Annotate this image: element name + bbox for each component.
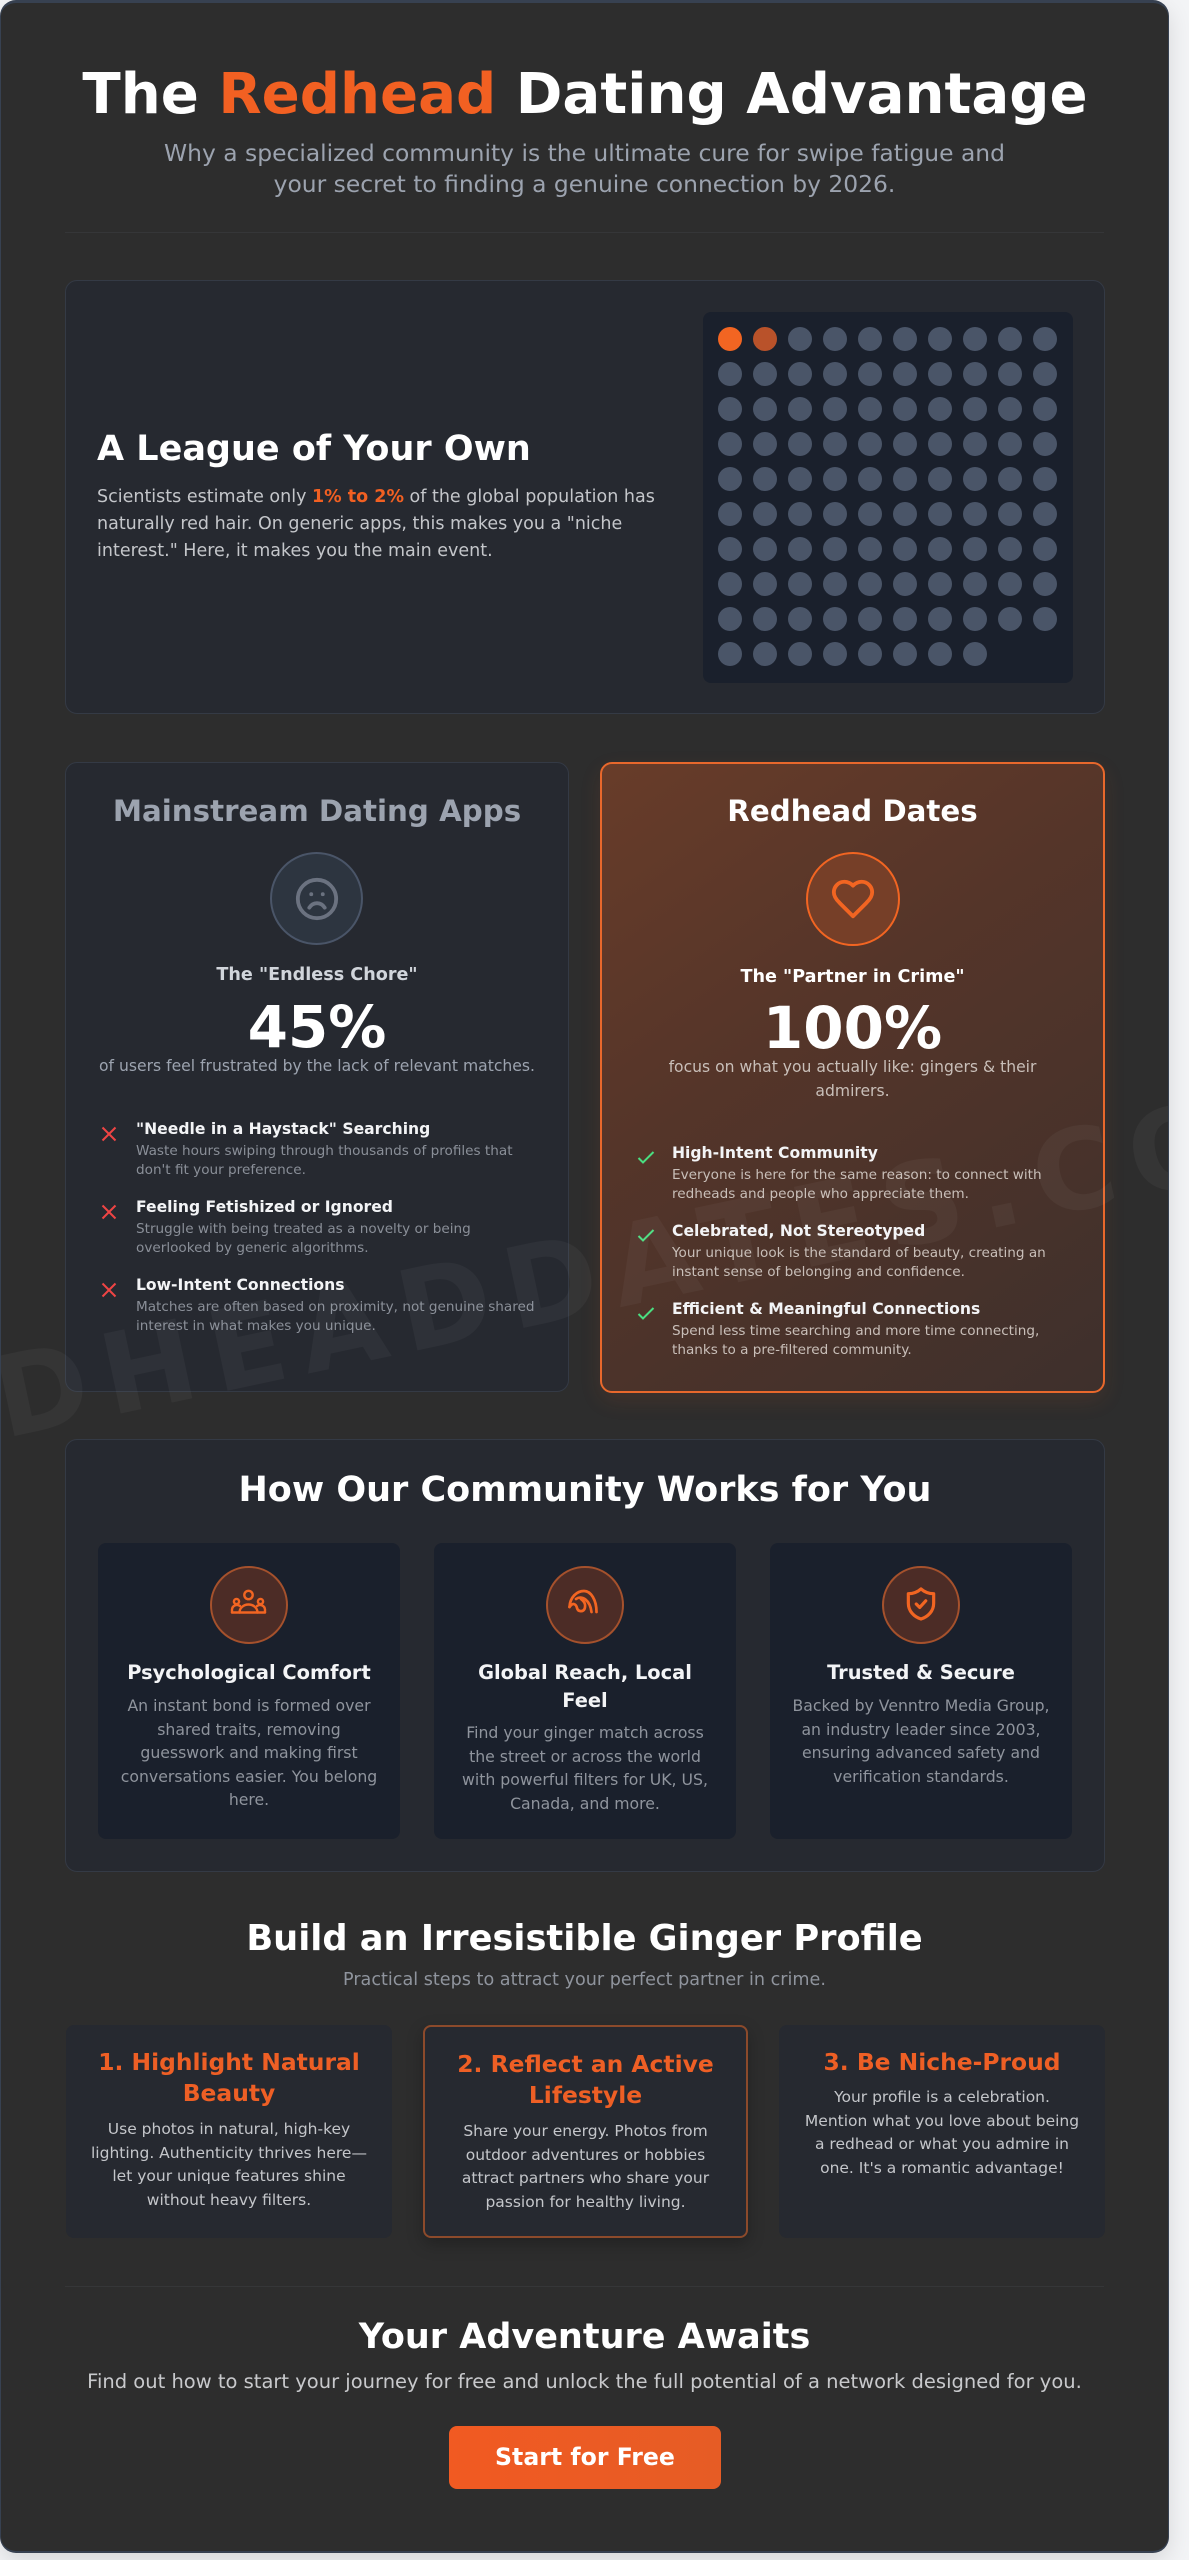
card: tip 1: let your unique features shine (112, 2167, 346, 2185)
tip 2 title: 2. Reflect an Active (457, 2050, 714, 2078)
item: celebrated (638, 1222, 1046, 1280)
stat: 45%: 45% (248, 993, 386, 1061)
tip 2 text: Share your energy. Photos from (463, 2122, 708, 2140)
heading: redhead dates: Redhead Dates (727, 794, 978, 828)
stat caption (669, 1058, 1036, 1100)
item: efficient (638, 1300, 1039, 1358)
panel: a league of your own (65, 280, 1105, 714)
heading: league: A League of Your Own (97, 429, 531, 469)
text: Find your ginger match across (466, 1723, 704, 1742)
card: global reach: Canada, and more. (510, 1794, 660, 1812)
item: fetishized or ignored (102, 1198, 471, 1256)
title (478, 1661, 692, 1712)
stat: 100%: 100% (763, 994, 942, 1062)
card: psychological comfort: conversations easier. You belong (121, 1766, 377, 1786)
item: low-intent connections (102, 1276, 535, 1334)
card: global reach: Feel (562, 1689, 608, 1712)
tip 3 text: Your profile is a celebration. (834, 2088, 1050, 2106)
tip 1 text (91, 2120, 367, 2208)
item: low-intent connections: interest in what makes you unique. (136, 1318, 376, 1334)
card: tip 2: Lifestyle (529, 2081, 642, 2109)
card: global reach (434, 1543, 736, 1839)
stat caption: admirers. (815, 1082, 890, 1100)
tip 1 text: Use photos in natural, high-key (108, 2120, 350, 2138)
item: efficient: Efficient & Meaningful Connections (672, 1300, 980, 1318)
item: efficient: thanks to a pre-filtered community. (672, 1342, 912, 1358)
subtitle (164, 139, 1005, 198)
card: psychological comfort (98, 1543, 400, 1839)
panel: mainstream dating apps (65, 762, 569, 1392)
label: partner in crime: The "Partner in Crime" (740, 967, 965, 987)
item: fetishized or ignored: Feeling Fetishized or Ignored (136, 1198, 393, 1216)
text: adventure description: Find out how to start your journey for free and unlock the full potential of a network designed for you. (87, 2370, 1082, 2393)
item: low-intent connections: Low-Intent Connections (136, 1276, 345, 1294)
stat caption: focus on what you actually like: gingers & their (669, 1058, 1036, 1076)
card: global reach: with powerful filters for UK, US, (462, 1770, 708, 1789)
item: efficient: Spend less time searching and more time connecting, (672, 1323, 1039, 1339)
card: tip 3: Mention what you love about being (805, 2112, 1079, 2130)
card: tip 3 (779, 2025, 1105, 2238)
tip 3 title: 3. Be Niche-Proud (824, 2048, 1060, 2076)
text: league description: naturally red hair. On generic apps, this makes you a "niche (97, 514, 622, 534)
text: league description: Scientists estimate only 1% to 2% of the global population has (97, 487, 655, 507)
card: tip 2: attract partners who share your (462, 2169, 709, 2187)
text (792, 1696, 1050, 1786)
item: high-intent community (638, 1144, 1042, 1202)
icon: globe (546, 1566, 624, 1644)
card: psychological comfort: shared traits, removing (157, 1720, 341, 1738)
icon: shield check (882, 1566, 960, 1644)
title: The Redhead Dating Advantage (82, 62, 1088, 127)
text: league description (97, 487, 655, 561)
text (121, 1696, 377, 1809)
text: An instant bond is formed over (127, 1696, 371, 1715)
card: tip 1: without heavy filters. (147, 2190, 311, 2208)
item: high-intent community: Everyone is here for the same reason: to connect with (672, 1167, 1042, 1183)
card: tip 2 (423, 2025, 748, 2238)
heading: mainstream: Mainstream Dating Apps (113, 794, 521, 828)
item: high-intent community: redheads and people who appreciate them. (672, 1186, 969, 1202)
text: Backed by Venntro Media Group, (792, 1696, 1050, 1715)
card: tip 1: Beauty (183, 2079, 275, 2107)
text (462, 1723, 708, 1812)
card: tip 1: lighting. Authenticity thrives here— (91, 2144, 367, 2162)
tip 1 title (98, 2048, 360, 2107)
title: Trusted & Secure (827, 1661, 1015, 1684)
subheading: build profile: Practical steps to attract your perfect partner in crime. (343, 1970, 826, 1990)
title: Psychological Comfort (127, 1661, 371, 1684)
item: needle in a haystack: don't fit your preference. (136, 1162, 306, 1178)
item: needle in a haystack (102, 1120, 513, 1178)
item: needle in a haystack: Waste hours swiping through thousands of profiles that (136, 1143, 513, 1159)
card: psychological comfort: here. (229, 1790, 269, 1809)
button: start for free: Start for Free (495, 2443, 675, 2471)
item: low-intent connections: Matches are often based on proximity, not genuine shared (136, 1299, 535, 1315)
subtitle: Why a specialized community is the ultimate cure for swipe fatigue and (164, 139, 1005, 167)
item: celebrated: Your unique look is the standard of beauty, creating an (672, 1245, 1046, 1261)
list: mainstream problems (102, 1120, 535, 1334)
item: high-intent community: High-Intent Community (672, 1144, 878, 1162)
item: fetishized or ignored: Struggle with being treated as a novelty or being (136, 1221, 471, 1237)
title: Global Reach, Local (478, 1661, 692, 1684)
heading: community: How Our Community Works for You (238, 1470, 931, 1510)
stat caption: of users feel frustrated by the lack of relevant matches. (99, 1057, 535, 1075)
card: trusted and secure: ensuring advanced safety and (802, 1743, 1040, 1762)
icon: people group (210, 1566, 288, 1644)
item: celebrated: Celebrated, Not Stereotyped (672, 1222, 925, 1240)
tip 2 title (457, 2050, 714, 2109)
panel: how our community works (65, 1439, 1105, 1872)
button: start for free (449, 2426, 721, 2489)
card: global reach: the street or across the world (469, 1746, 701, 1766)
text: league description: interest." Here, it makes you the main event. (97, 541, 493, 561)
card: psychological comfort: guesswork and making first (140, 1743, 358, 1762)
icon: sad face (270, 852, 363, 945)
item: needle in a haystack: "Needle in a Haystack" Searching (136, 1120, 430, 1138)
list: redhead benefits (638, 1144, 1046, 1358)
card: tip 3: a redhead or what you admire in (815, 2135, 1069, 2153)
item: fetishized or ignored: overlooked by generic algorithms. (136, 1240, 369, 1256)
card: tip 2: outdoor adventures or hobbies (466, 2146, 705, 2164)
heading: your adventure awaits: Your Adventure Awaits (359, 2317, 810, 2357)
card: trusted and secure: verification standards. (833, 1766, 1009, 1786)
card: tip 3: one. It's a romantic advantage! (820, 2158, 1064, 2176)
panel: redhead dates (600, 762, 1105, 1393)
tip 2 text (462, 2122, 710, 2210)
label: endless chore: The "Endless Chore" (216, 965, 418, 985)
tip 3 text (805, 2088, 1079, 2176)
subtitle: your secret to finding a genuine connection by 2026. (274, 170, 895, 198)
heading: build profile: Build an Irresistible Ginger Profile (246, 1918, 923, 1959)
chart: dot grid of population (703, 312, 1073, 683)
item: celebrated: instant sense of belonging and confidence. (672, 1264, 965, 1280)
card: tip 2: passion for healthy living. (485, 2192, 686, 2210)
tip 1 title: 1. Highlight Natural (98, 2048, 360, 2076)
icon: heart (806, 852, 900, 946)
card: trusted and secure (770, 1543, 1072, 1839)
card: tip 1 (66, 2025, 392, 2238)
card: trusted and secure: an industry leader since 2003, (801, 1720, 1041, 1738)
